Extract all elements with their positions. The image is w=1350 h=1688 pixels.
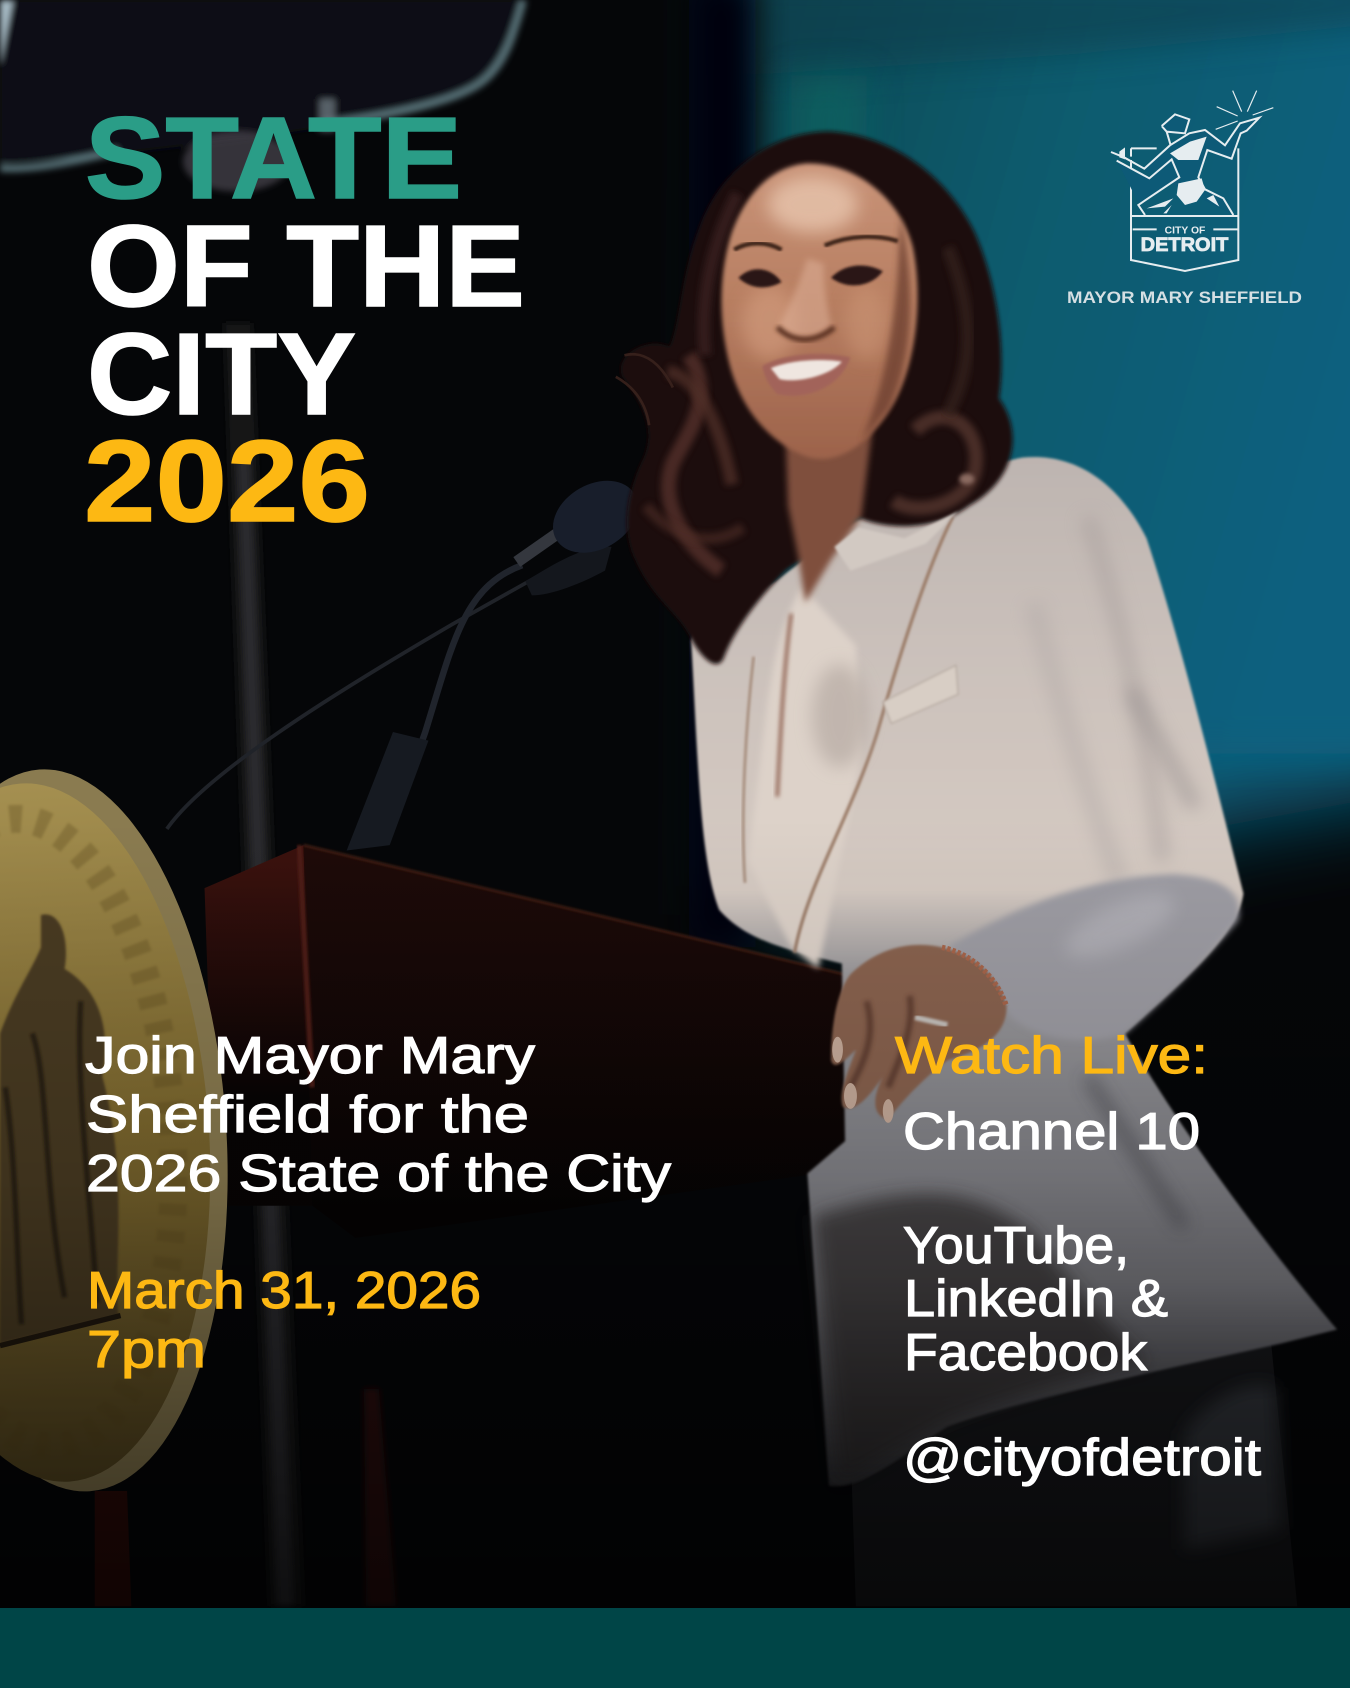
peplum shadow bbox=[813, 1194, 1147, 1480]
photo darkening overlay bbox=[0, 818, 1350, 1615]
linkedin: LinkedIn & bbox=[904, 1270, 1168, 1328]
youtube: YouTube, bbox=[903, 1217, 1129, 1275]
logo rays bbox=[1216, 91, 1273, 129]
lapel lines bbox=[795, 517, 953, 953]
logo: City of Detroit bbox=[1111, 91, 1273, 271]
eyes and brows bbox=[734, 243, 782, 250]
prompter stand pole bbox=[224, 323, 304, 1606]
logo wordmark: DETROIT: DETROIT bbox=[1141, 235, 1229, 256]
logo figure bbox=[1111, 114, 1259, 215]
microphones bbox=[167, 466, 651, 850]
teal stage backdrop bbox=[689, 0, 1350, 947]
city seal bbox=[0, 758, 251, 1502]
logo wordmark: CITY OF: CITY OF bbox=[1165, 225, 1205, 236]
hand on podium bbox=[831, 945, 1007, 1123]
date: March 31, 2026 bbox=[87, 1262, 481, 1320]
title line: CITY: CITY bbox=[87, 309, 356, 439]
cuff bbox=[947, 874, 1239, 1040]
title line: OF THE: OF THE bbox=[87, 201, 525, 331]
trousers bbox=[850, 1335, 1297, 1606]
watch live heading: Watch Live: bbox=[895, 1027, 1208, 1085]
invitation line 1: Join Mayor Mary bbox=[85, 1027, 535, 1085]
jacket shading bbox=[1087, 517, 1163, 861]
nose bbox=[779, 258, 831, 338]
smile bbox=[762, 354, 850, 396]
invitation text bbox=[85, 1027, 671, 1203]
face bbox=[721, 164, 918, 459]
mayor name: MAYOR MARY SHEFFIELD bbox=[1067, 288, 1302, 307]
title line: STATE: STATE bbox=[85, 93, 462, 223]
collar bbox=[834, 511, 958, 571]
blouse bbox=[748, 587, 861, 969]
title bbox=[84, 93, 525, 546]
facebook: Facebook bbox=[904, 1324, 1148, 1382]
invitation line 2: Sheffield for the bbox=[86, 1086, 529, 1144]
social handle: @cityofdetroit bbox=[903, 1429, 1262, 1487]
date and time bbox=[87, 1262, 481, 1379]
fingernails bbox=[832, 1037, 894, 1123]
teleprompter frame bbox=[0, 0, 525, 192]
pocket shadow bbox=[812, 664, 868, 768]
time: 7pm bbox=[87, 1321, 206, 1379]
channel 10: Channel 10 bbox=[903, 1103, 1200, 1161]
title line: 2026: 2026 bbox=[84, 416, 370, 546]
neck bbox=[786, 431, 872, 603]
invitation line 3: 2026 State of the City bbox=[86, 1145, 671, 1203]
seal figure bbox=[0, 914, 118, 1344]
breast pocket bbox=[883, 665, 958, 723]
watch live channels bbox=[903, 1103, 1262, 1487]
logo shield bbox=[1131, 148, 1238, 271]
podium bbox=[95, 845, 861, 1606]
hair bbox=[616, 131, 1013, 664]
white jacket bbox=[691, 457, 1337, 1486]
footer band bbox=[0, 1608, 1350, 1688]
